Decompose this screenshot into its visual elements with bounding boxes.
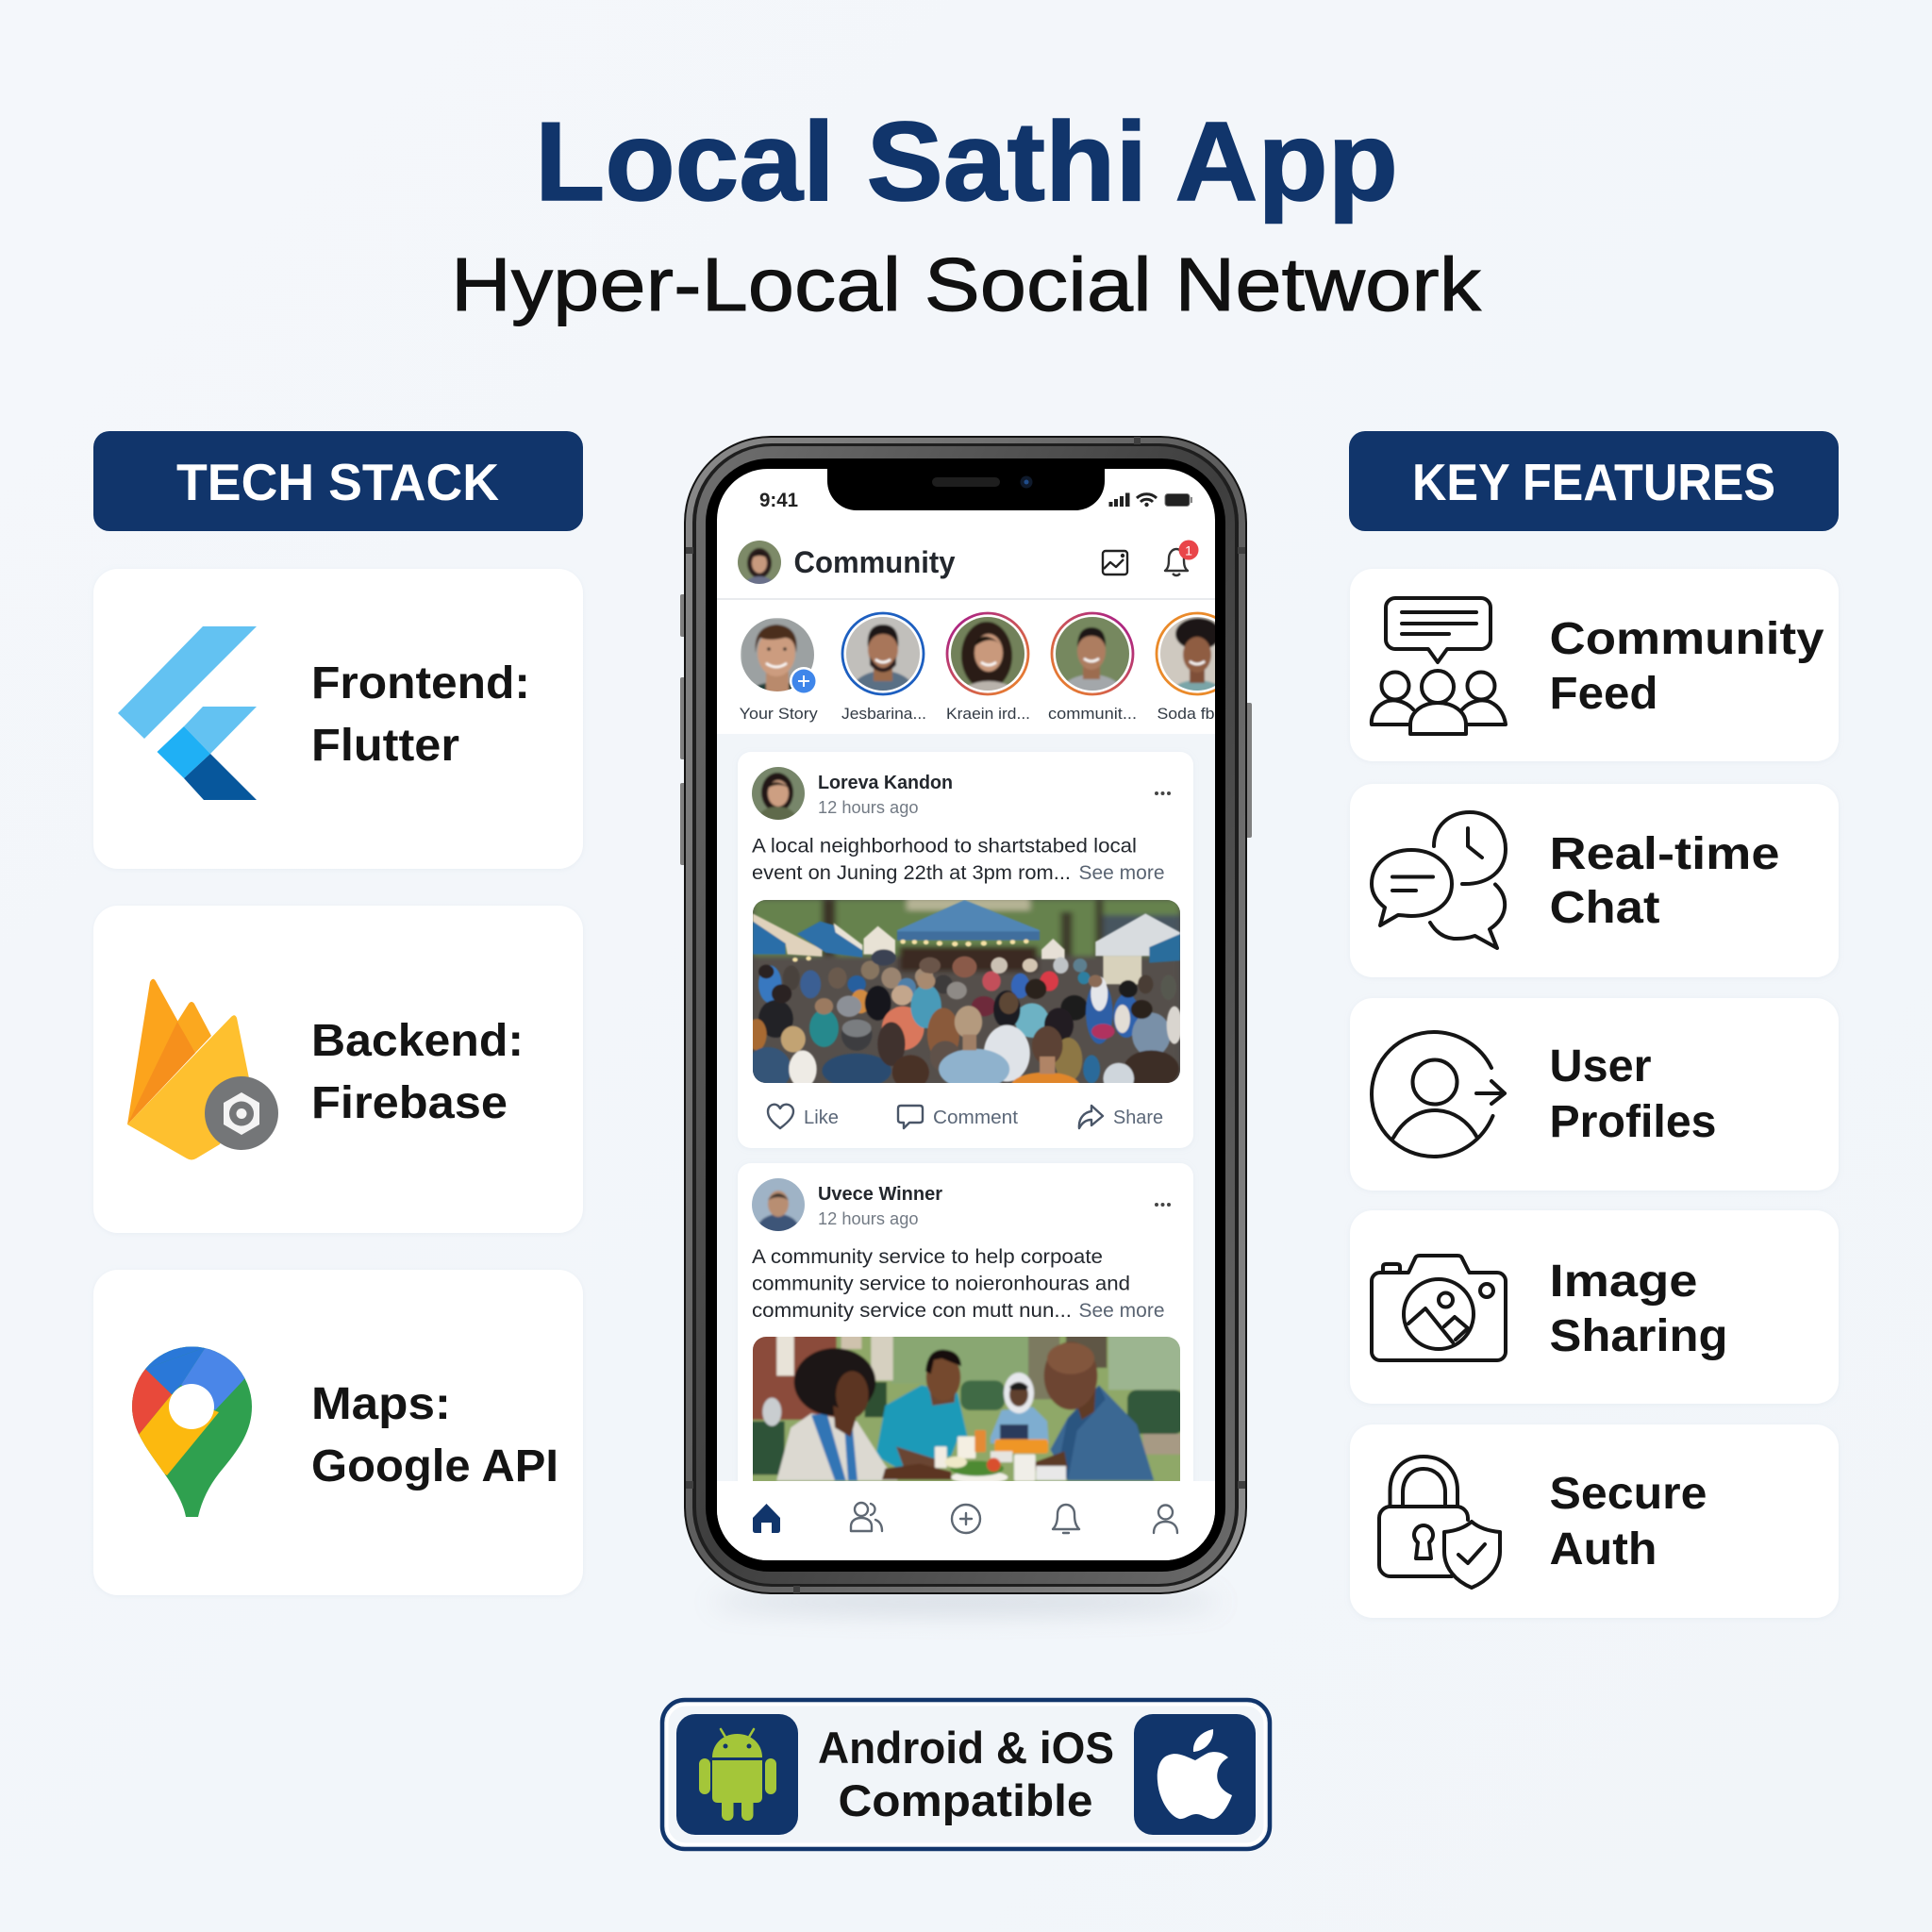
icon: community feed xyxy=(1372,598,1506,734)
stories row xyxy=(740,613,1238,724)
story: jesbarina: Jesbarina... xyxy=(841,705,926,723)
label: real-time chat: Real-time xyxy=(1549,829,1779,879)
label: secure auth: Auth xyxy=(1549,1524,1657,1574)
more menu xyxy=(1155,791,1171,795)
card: maps google api xyxy=(93,1270,583,1595)
icon: flutter logo xyxy=(118,626,257,800)
story: kraein: Kraein ird... xyxy=(946,705,1030,723)
app header title: Community xyxy=(794,545,956,579)
label: frontend flutter: Frontend: xyxy=(311,658,530,708)
story: jesbarina xyxy=(841,613,926,723)
badge text: Compatible xyxy=(838,1775,1092,1825)
post text xyxy=(752,836,1164,884)
label: user profiles: User xyxy=(1549,1041,1651,1091)
label: maps google api: Maps: xyxy=(311,1379,451,1429)
post author: Uvece Winner xyxy=(818,1184,942,1205)
label: frontend flutter xyxy=(311,658,530,771)
card: community feed xyxy=(1350,569,1839,761)
action: comment: Comment xyxy=(933,1108,1018,1128)
nav: profile xyxy=(1154,1506,1177,1533)
story: community xyxy=(1048,613,1137,723)
nav: create xyxy=(952,1505,980,1533)
front crowd xyxy=(753,973,1180,1083)
post text: event on Juning 22th at 3pm rom... xyxy=(752,862,1071,884)
icon: camera xyxy=(1372,1256,1506,1360)
label: frontend flutter: Flutter xyxy=(311,721,459,771)
right man xyxy=(1050,1385,1154,1480)
action: like: Like xyxy=(804,1108,839,1128)
photo: neighbourhood event crowd xyxy=(753,900,1180,1083)
label: maps google api xyxy=(311,1379,558,1491)
heading: tech stack: TECH STACK xyxy=(176,453,499,511)
photo: neighbours at a table xyxy=(750,1333,1184,1484)
phone screen xyxy=(717,458,1238,1566)
icon: gallery xyxy=(1103,551,1127,575)
label: backend firebase: Firebase xyxy=(311,1078,508,1128)
bottom navigation xyxy=(717,1481,1215,1566)
post author xyxy=(818,1184,942,1228)
label: secure auth: Secure xyxy=(1549,1469,1707,1519)
subtitle: Hyper-Local Social Network xyxy=(451,242,1482,326)
phone mockup xyxy=(680,436,1252,1611)
post text: See more xyxy=(1079,1300,1164,1322)
story: soda xyxy=(1155,611,1215,719)
label: backend firebase xyxy=(311,1016,524,1128)
icon: google maps pin xyxy=(132,1347,252,1517)
card: frontend flutter xyxy=(93,569,583,869)
label: image sharing xyxy=(1549,1257,1728,1361)
post text: See more xyxy=(1079,862,1164,884)
nav: home xyxy=(753,1504,780,1533)
icon: apple xyxy=(1134,1714,1256,1835)
heading: key features: KEY FEATURES xyxy=(1412,453,1775,511)
post text: A community service to help corpoate xyxy=(752,1246,1103,1268)
icon: firebase logo xyxy=(127,979,278,1160)
post avatar xyxy=(752,1178,805,1231)
label: community feed: Feed xyxy=(1549,669,1658,719)
panel: tech stack xyxy=(93,431,583,1595)
title: Local Sathi App xyxy=(535,99,1398,225)
post text: A local neighborhood to shartstabed local xyxy=(752,836,1137,857)
status bar xyxy=(760,492,1192,508)
back rows xyxy=(758,949,1176,1021)
teal-shirt man xyxy=(875,1385,968,1470)
card: user profiles xyxy=(1350,998,1839,1191)
post card: Loreva Kandon xyxy=(738,752,1193,1148)
label: real-time chat xyxy=(1549,829,1779,933)
icon: notification bell xyxy=(1165,540,1198,575)
label: real-time chat: Chat xyxy=(1549,883,1660,933)
icon: real-time chat xyxy=(1372,812,1506,948)
card: real-time chat xyxy=(1350,784,1839,977)
label: community feed xyxy=(1549,614,1824,719)
nav: people xyxy=(851,1503,882,1531)
post author: 12 hours ago xyxy=(818,1209,919,1228)
post text: community service con mutt nun... xyxy=(752,1300,1072,1322)
panel: key features xyxy=(1349,431,1839,1618)
woman left xyxy=(776,1413,898,1480)
label: community feed: Community xyxy=(1549,614,1824,664)
card: backend firebase xyxy=(93,906,583,1233)
icon: notification bell: 1 xyxy=(1185,543,1192,558)
heading: tech stack xyxy=(93,431,583,531)
action: comment xyxy=(898,1106,1018,1128)
story: soda: Soda fb xyxy=(1157,705,1215,723)
action: like xyxy=(768,1105,839,1128)
compatibility badge xyxy=(662,1700,1270,1849)
story: kraein xyxy=(946,613,1030,723)
status bar: 9:41 xyxy=(759,490,798,511)
avatar: header profile xyxy=(738,541,781,584)
story: your story: Your Story xyxy=(740,705,818,723)
story: your story xyxy=(740,618,818,724)
action: share xyxy=(1079,1106,1163,1128)
card: image sharing xyxy=(1350,1210,1839,1404)
action: share: Share xyxy=(1113,1108,1163,1128)
icon: user profiles xyxy=(1372,1032,1505,1157)
heading: key features xyxy=(1349,431,1839,531)
story: community: communit... xyxy=(1048,705,1137,723)
nav: notifications xyxy=(1053,1505,1079,1533)
label: image sharing: Sharing xyxy=(1549,1311,1728,1361)
post card: Uvece Winner xyxy=(738,1163,1193,1503)
post author: Loreva Kandon xyxy=(818,773,953,793)
post text xyxy=(752,1246,1164,1322)
badge text xyxy=(818,1723,1114,1825)
notch xyxy=(827,469,1105,510)
label: secure auth xyxy=(1549,1469,1707,1574)
label: backend firebase: Backend: xyxy=(311,1016,524,1066)
label: image sharing: Image xyxy=(1549,1257,1698,1307)
label: maps google api: Google API xyxy=(311,1441,558,1491)
icon: lock and shield xyxy=(1379,1457,1500,1588)
table and food xyxy=(1014,1455,1036,1481)
post author: 12 hours ago xyxy=(818,798,919,817)
badge text: Android & iOS xyxy=(818,1723,1114,1773)
icon: android xyxy=(676,1714,798,1835)
label: user profiles: Profiles xyxy=(1549,1097,1717,1147)
headscarf woman xyxy=(991,1407,1049,1443)
post text: community service to noieronhouras and xyxy=(752,1274,1130,1294)
label: user profiles xyxy=(1549,1041,1717,1147)
post avatar xyxy=(752,767,805,820)
more menu xyxy=(1155,1203,1171,1207)
card: secure auth xyxy=(1350,1424,1839,1618)
post author xyxy=(818,773,953,817)
